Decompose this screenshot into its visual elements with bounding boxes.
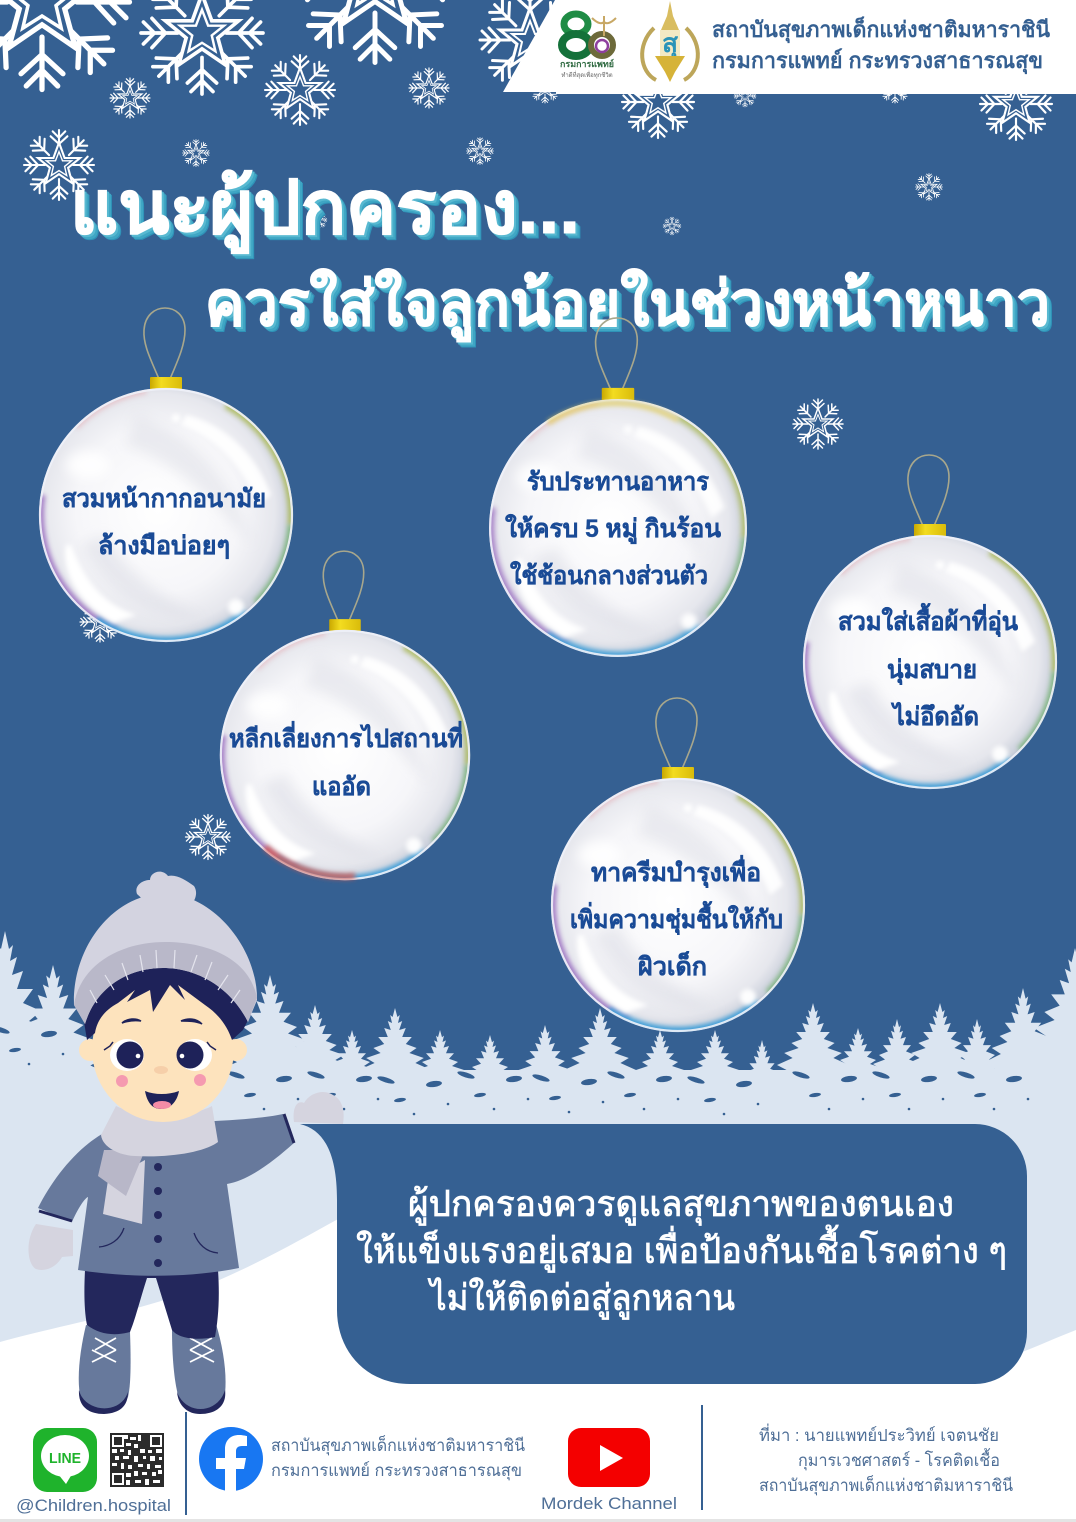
bauble: warm clothes: นุ่มสบาย bbox=[887, 656, 977, 686]
footer: line contact bbox=[16, 1428, 171, 1515]
mouth bbox=[145, 1091, 179, 1109]
bauble: nutrition: ให้ครบ 5 หมู่ กินร้อน bbox=[505, 513, 721, 545]
footer: source credit: สถาบันสุขภาพเด็กแห่งชาติมหาราชินี bbox=[759, 1474, 1013, 1496]
message panel: ผู้ปกครองควรดูแลสุขภาพของตนเอง bbox=[408, 1183, 954, 1226]
bauble: nutrition bbox=[489, 318, 747, 657]
header banner bbox=[503, 0, 1076, 94]
eyes bbox=[110, 1039, 144, 1071]
trousers bbox=[84, 1270, 219, 1339]
snowy treeline and ground bbox=[0, 931, 1076, 1522]
scarf bbox=[103, 1160, 145, 1224]
header text: กรมการแพทย์ กระทรวงสาธารณสุข bbox=[712, 48, 1043, 75]
sleeve cuffs bbox=[39, 1211, 72, 1221]
bauble: nutrition: รับประทานอาหาร bbox=[527, 468, 710, 496]
head bbox=[74, 872, 257, 1122]
footer: youtube bbox=[541, 1428, 677, 1513]
mitten: lowered bbox=[28, 1224, 73, 1270]
icon: line bbox=[33, 1428, 97, 1492]
footer: youtube: Mordek Channel bbox=[541, 1494, 677, 1513]
bauble: mask and handwashing: ล้างมือบ่อยๆ bbox=[98, 532, 230, 560]
bauble: mask and handwashing bbox=[39, 308, 293, 642]
logo: 80 years: ทำดีที่สุดเพื่อทุกชีวิต bbox=[561, 71, 613, 79]
message panel: ไม่ให้ติดต่อสู่ลูกหลาน bbox=[427, 1277, 735, 1320]
mitten: raised bbox=[294, 1092, 344, 1124]
footer: facebook: กรมการแพทย์ กระทรวงสาธารณสุข bbox=[271, 1461, 522, 1481]
bauble: warm clothes: ไม่อึดอัด bbox=[890, 701, 979, 731]
buttons bbox=[154, 1163, 162, 1267]
bauble: moisturiser: ผิวเด็ก bbox=[638, 951, 707, 981]
child character bbox=[28, 872, 344, 1414]
header text bbox=[712, 15, 1050, 75]
footer: facebook: สถาบันสุขภาพเด็กแห่งชาติมหาราชินี bbox=[271, 1434, 525, 1456]
footer: facebook bbox=[199, 1427, 525, 1491]
footer divider: right bbox=[701, 1405, 703, 1510]
bauble: avoid crowds bbox=[220, 551, 470, 880]
message panel: ให้แข็งแรงอยู่เสมอ เพื่อป้องกันเชื้อโรคต่าง ๆ bbox=[356, 1224, 1007, 1273]
icon: line: LINE bbox=[49, 1450, 81, 1467]
branch gaps in the treeline bbox=[0, 1025, 1029, 1115]
footer: line contact: @Children.hospital bbox=[16, 1496, 171, 1515]
brows bbox=[122, 1019, 202, 1024]
title bbox=[70, 166, 1050, 342]
message panel bbox=[300, 1124, 1027, 1384]
footer: source credit: ที่มา : นายแพทย์ประวิทย์ เจตนชัย bbox=[759, 1423, 999, 1445]
jacket bbox=[38, 1114, 295, 1276]
bauble: mask and handwashing: สวมหน้ากากอนามัย bbox=[62, 485, 266, 513]
header text: สถาบันสุขภาพเด็กแห่งชาติมหาราชินี bbox=[712, 15, 1050, 44]
logo: royal emblem: สุ bbox=[662, 28, 678, 60]
boots bbox=[79, 1324, 226, 1414]
footer: source credit: กุมารเวชศาสตร์ - โรคติดเชื้อ bbox=[798, 1448, 1000, 1471]
title: แนะผู้ปกครอง... bbox=[70, 166, 580, 254]
knit hat bbox=[74, 893, 257, 1024]
footer divider: left bbox=[185, 1412, 187, 1515]
icon: qr code bbox=[110, 1433, 164, 1487]
bauble: moisturiser bbox=[551, 698, 805, 1032]
bauble: avoid crowds: แออัด bbox=[312, 773, 371, 801]
logo: 80 years: กรมการแพทย์ bbox=[560, 58, 614, 69]
bauble: moisturiser: เพิ่มความชุ่มชื้นให้กับ bbox=[570, 900, 783, 936]
bauble: nutrition: ใช้ช้อนกลางส่วนตัว bbox=[510, 560, 708, 590]
bauble: avoid crowds: หลีกเลี่ยงการไปสถานที่ bbox=[229, 721, 463, 753]
cheeks and nose bbox=[116, 1075, 128, 1087]
bauble: moisturiser: ทาครีมบำรุงเพื่อ bbox=[591, 855, 761, 889]
pockets bbox=[99, 1228, 218, 1253]
snowflakes bbox=[0, 0, 1052, 859]
logo: royal emblem bbox=[642, 1, 698, 82]
logo: 80 years bbox=[560, 14, 616, 79]
bauble: warm clothes: สวมใส่เสื้อผ้าที่อุ่น bbox=[838, 602, 1018, 638]
title: ควรใส่ใจลูกน้อยในช่วงหน้าหนาว bbox=[205, 268, 1050, 342]
bauble: warm clothes bbox=[803, 455, 1057, 789]
hair bbox=[84, 966, 248, 1040]
footer: source credit bbox=[759, 1423, 1013, 1496]
